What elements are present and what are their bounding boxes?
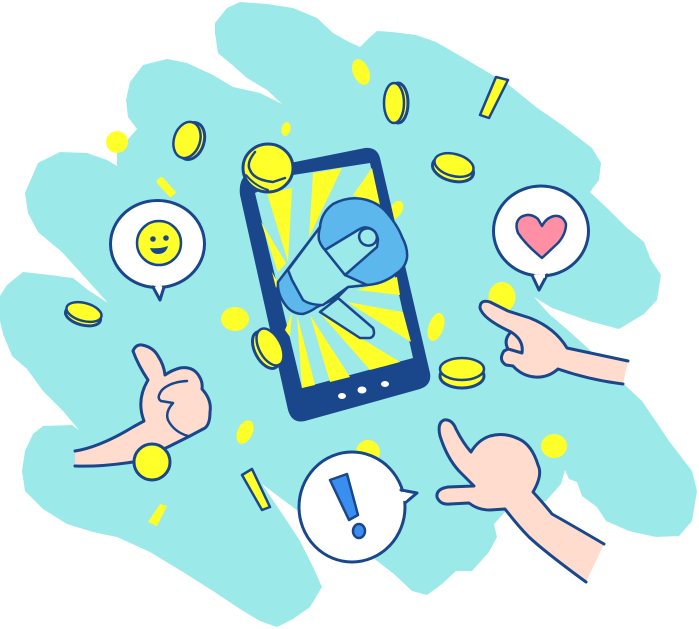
coin: right of phone lower xyxy=(440,358,484,388)
mouth end xyxy=(356,225,380,249)
coin: on phone top left xyxy=(243,144,293,192)
coin: oval beside phone xyxy=(424,311,448,343)
phone body xyxy=(240,148,430,422)
coin: behind speech bubble xyxy=(356,440,380,464)
coin: top center oval xyxy=(349,56,373,88)
heart icon xyxy=(517,215,566,258)
coin: large dot beside phone xyxy=(221,307,249,331)
exclamation mark xyxy=(330,474,358,520)
screen rays xyxy=(261,168,411,388)
coin: under thumbs up xyxy=(134,444,170,480)
mouth panel xyxy=(325,227,378,275)
speech bubble: exclamation xyxy=(299,452,417,562)
coin: right of phone top xyxy=(430,149,476,186)
hand: pointing xyxy=(480,301,628,384)
coin: dot by pointing hand xyxy=(488,282,516,312)
coin: on phone lower left xyxy=(247,324,289,373)
coin: bar top right xyxy=(480,77,508,118)
phone xyxy=(240,148,430,422)
coin: small dot upper left xyxy=(106,131,128,153)
horn face xyxy=(288,227,367,305)
coin: small dash top xyxy=(280,121,292,137)
speech bubble: heart xyxy=(494,186,588,290)
coin: sliver behind phone xyxy=(386,198,406,222)
home buttons xyxy=(338,381,389,399)
coin: slim dash lower left xyxy=(148,504,167,526)
coin: upper left xyxy=(169,118,209,163)
coin: dot by lower hand xyxy=(541,434,567,458)
smiley face xyxy=(137,221,181,265)
coin: top right of phone xyxy=(384,83,408,123)
hand: lower reaching xyxy=(437,420,604,582)
coin: bar lower left xyxy=(242,469,270,510)
hand: thumbs up xyxy=(75,345,210,466)
coin: small oval below left xyxy=(233,418,257,446)
phone screen xyxy=(255,163,413,388)
bell and rim outline xyxy=(278,198,407,314)
coin: slim dash left xyxy=(156,176,176,198)
megaphone xyxy=(278,198,407,338)
coin: left flat xyxy=(63,299,104,329)
speech bubble: smiley xyxy=(110,200,204,300)
handle xyxy=(320,298,374,338)
